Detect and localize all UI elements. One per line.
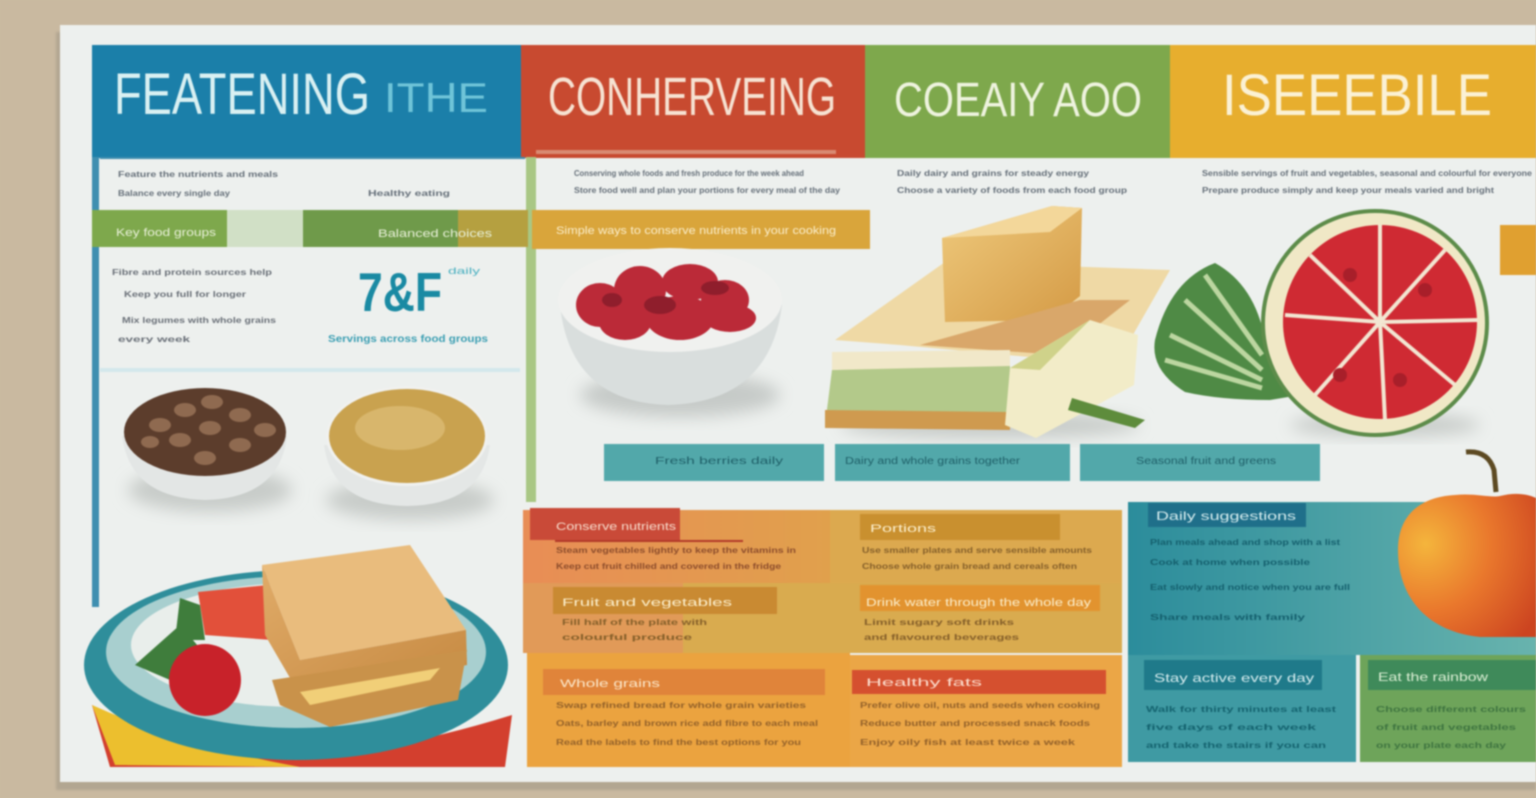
sub-banner strip: green and gold: Simple ways to conserve nutrients in your cooking	[556, 225, 836, 237]
left notes text: Fibre and protein sources help	[112, 268, 272, 277]
panel: green bottom	[1360, 655, 1536, 762]
intro text blocks: Feature the nutrients and meals	[118, 170, 279, 179]
statistic: 7&F: Servings across food groups	[328, 334, 488, 345]
panel: middle row: Limit sugary soft drinks	[864, 618, 1015, 627]
panel: gold tips: Choose whole grain bread and cereals often	[862, 562, 1077, 571]
left notes text: Keep you full for longer	[124, 290, 246, 299]
left notes text	[112, 268, 277, 344]
intro text blocks: Prepare produce simply and keep your meals varied and bright	[1202, 186, 1494, 195]
sub-banner strip: green and gold	[92, 210, 870, 249]
panel: bottom orange left	[527, 653, 850, 767]
header banner: green: COEAIY AOO	[894, 74, 1142, 127]
header banner: red: CONHERVEING	[548, 67, 836, 127]
teal labels	[604, 444, 1320, 481]
panel: gold tips: Portions	[870, 523, 937, 535]
header banner: blue	[92, 45, 522, 158]
panel: teal info: Daily suggestions	[1156, 509, 1296, 523]
header banner: yellow: ISEEEBILE	[1222, 63, 1492, 128]
panel: bottom orange left: Read the labels to find the best options for you	[556, 738, 801, 747]
intro text blocks: Store food well and plan your portions for every meal of the day	[574, 186, 841, 195]
intro text blocks	[118, 169, 1533, 198]
panel: middle row: colourful produce	[562, 633, 693, 642]
panel: orange tips: Conserve nutrients	[556, 521, 677, 533]
illustration: plate with bread and strawberry	[84, 545, 512, 767]
icon: bowl of soup	[324, 386, 494, 520]
panel: middle row	[523, 583, 1122, 653]
panel: teal bottom	[1128, 655, 1356, 762]
header banner: yellow	[1170, 45, 1536, 158]
intro text blocks: Balance every single day	[118, 189, 231, 198]
panel: gold tips: Use smaller plates and serve sensible amounts	[862, 546, 1093, 555]
column rules	[92, 150, 836, 607]
panel: teal info: Eat slowly and notice when you are full	[1150, 583, 1350, 592]
intro text blocks: Conserving whole foods and fresh produce for the week ahead	[574, 169, 804, 178]
intro text blocks: Healthy eating	[368, 189, 450, 198]
illustration: citrus slice	[1263, 211, 1487, 437]
panel: teal bottom: Walk for thirty minutes at least	[1146, 705, 1337, 714]
panel: middle row: and flavoured beverages	[864, 633, 1020, 642]
panel: green bottom: on your plate each day	[1376, 741, 1507, 750]
illustration: bowl of berries	[558, 248, 782, 417]
panel: orange tips: Steam vegetables lightly to keep the vitamins in	[556, 546, 796, 555]
panel: green bottom: Choose different colours	[1376, 705, 1527, 714]
intro text blocks: Daily dairy and grains for steady energy	[897, 169, 1090, 178]
panel: bottom orange right: Prefer olive oil, nuts and seeds when cooking	[860, 701, 1100, 710]
illustration: cheese and cake	[825, 206, 1170, 439]
panel: middle row: Fruit and vegetables	[562, 597, 733, 609]
sub-banner strip: green and gold: Key food groups	[116, 227, 217, 239]
illustration: apple	[1398, 452, 1536, 637]
panel: middle row: Fill half of the plate with	[562, 618, 707, 627]
left notes text: Mix legumes with whole grains	[122, 316, 277, 325]
panel: teal info: Plan meals ahead and shop with a list	[1150, 538, 1340, 547]
illustration: leafy greens	[1154, 263, 1300, 400]
panel: bottom orange right: Healthy fats	[866, 677, 983, 689]
panel: green bottom: of fruit and vegetables	[1376, 723, 1517, 732]
panel: middle row: Drink water through the whole day	[866, 597, 1092, 609]
panel: teal info	[1128, 502, 1536, 655]
statistic: 7&F: daily	[448, 266, 481, 276]
teal labels: Fresh berries daily	[655, 456, 783, 467]
left notes text: every week	[118, 335, 191, 344]
intro text blocks: Sensible servings of fruit and vegetables, seasonal and colourful for everyone	[1202, 169, 1533, 178]
panel: teal bottom: and take the stairs if you can	[1146, 741, 1326, 750]
teal labels: Dairy and whole grains together	[845, 456, 1021, 467]
panel: gold tips	[830, 510, 1122, 583]
header banner: green	[865, 45, 1171, 158]
panel: green bottom: Eat the rainbow	[1378, 670, 1488, 684]
intro text blocks: Choose a variety of foods from each food group	[897, 186, 1127, 195]
panel: teal info: Share meals with family	[1150, 613, 1306, 622]
icon: bowl of beans	[122, 388, 292, 512]
panel: bottom orange right: Reduce butter and processed snack foods	[860, 719, 1091, 728]
statistic: 7&F: 7&F	[358, 261, 442, 323]
panel: bottom orange right	[850, 655, 1122, 767]
panel: orange tips: Keep cut fruit chilled and covered in the fridge	[556, 562, 782, 571]
panel: bottom orange left: Swap refined bread for whole grain varieties	[556, 701, 807, 710]
panel: bottom orange right: Enjoy oily fish at least twice a week	[860, 738, 1076, 747]
panel: teal info: Cook at home when possible	[1150, 558, 1311, 567]
header banner: red	[521, 45, 865, 158]
side tab	[1500, 225, 1536, 275]
panel: orange tips	[523, 508, 830, 583]
teal labels: Seasonal fruit and greens	[1136, 456, 1276, 467]
header banner: blue: ITHE	[384, 74, 488, 121]
header banner: blue: FEATENING	[114, 62, 370, 127]
panel: teal bottom: five days of each week	[1146, 723, 1317, 732]
statistic: 7&F	[328, 261, 488, 345]
panel: bottom orange left: Whole grains	[560, 678, 661, 690]
panel: teal bottom: Stay active every day	[1154, 671, 1314, 685]
panel: bottom orange left: Oats, barley and brown rice add fibre to each meal	[556, 719, 818, 728]
sub-banner strip: green and gold: Balanced choices	[378, 228, 493, 240]
